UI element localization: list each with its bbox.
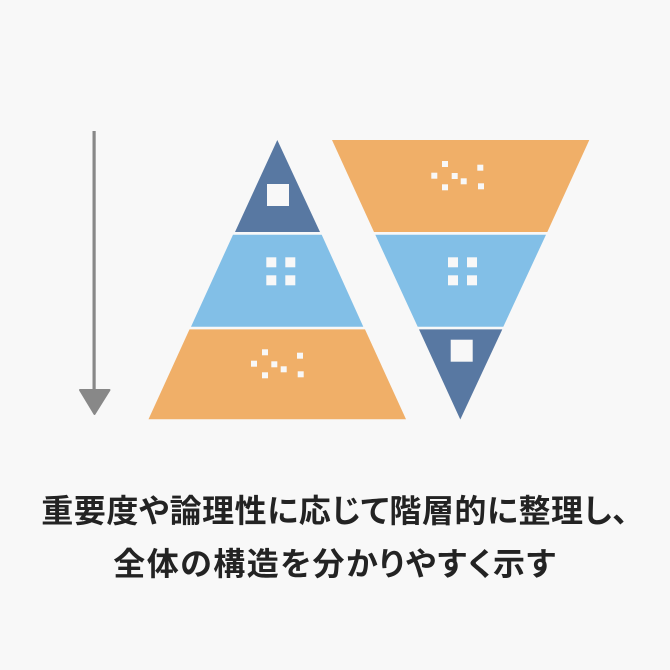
caption text [41, 493, 629, 582]
pyramid top layer [235, 140, 320, 232]
caption line 2: 全体の構造を分かりやすく示す [113, 546, 557, 582]
pyramid middle layer [191, 235, 363, 327]
pyramid bottom layer [148, 329, 406, 419]
inverted pyramid bottom layer [419, 329, 502, 420]
inverted pyramid middle layer [375, 235, 546, 327]
pyramid [148, 140, 406, 419]
inverted pyramid [332, 140, 589, 420]
arrow: top to bottom [80, 131, 110, 414]
caption line 1: 重要度や論理性に応じて階層的に整理し、 [41, 493, 629, 529]
inverted pyramid top layer [332, 140, 589, 232]
